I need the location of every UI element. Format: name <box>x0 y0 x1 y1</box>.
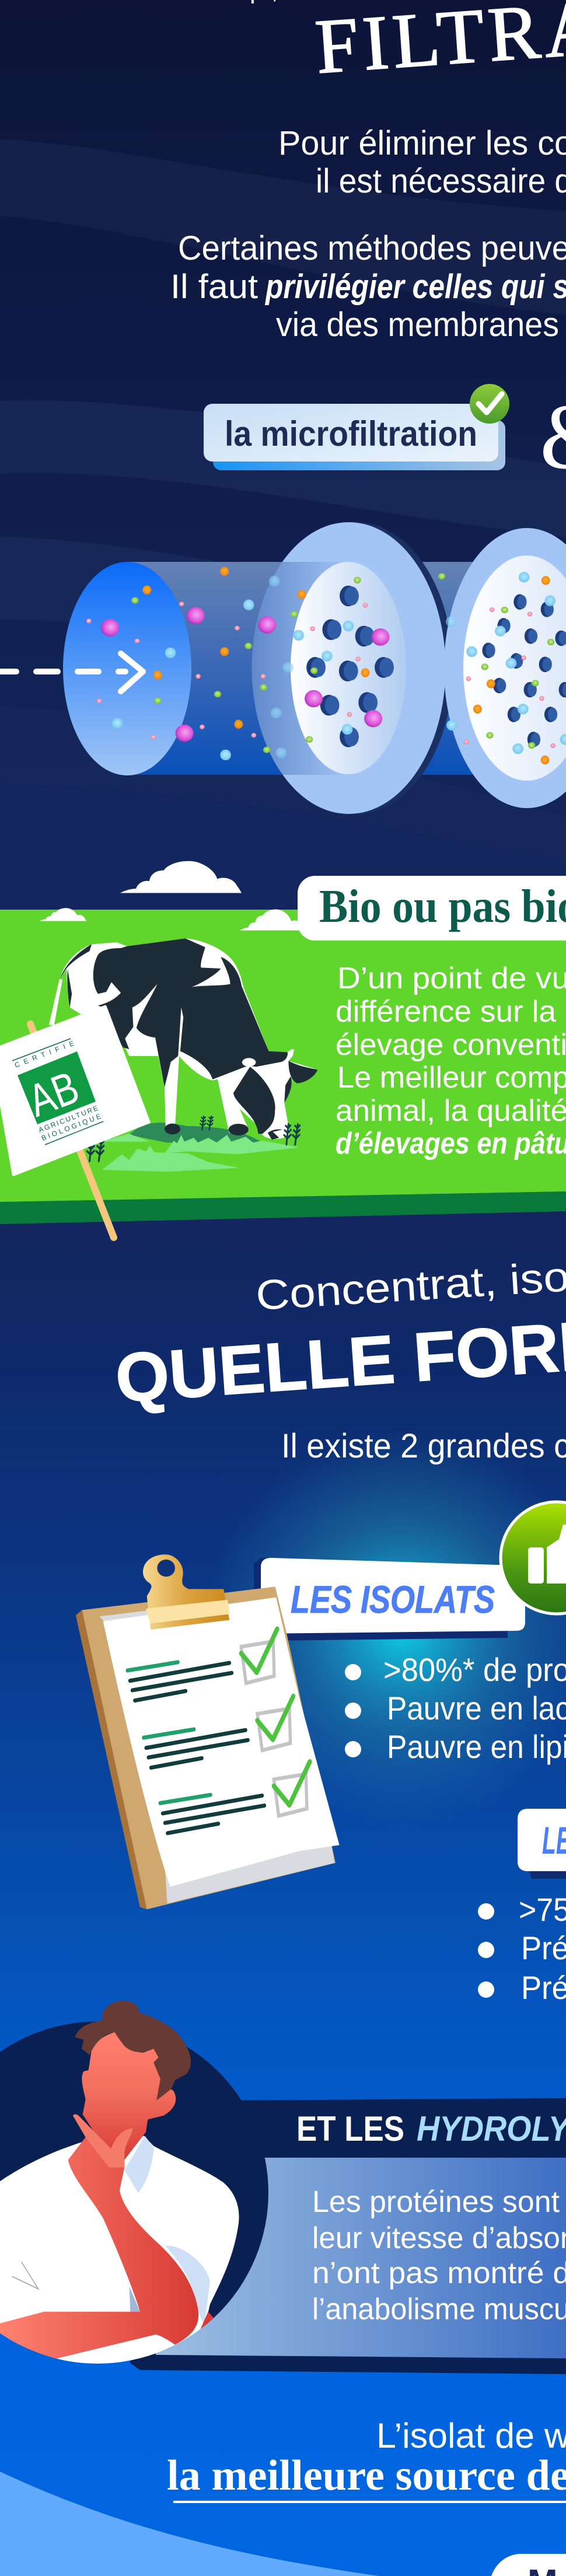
green field <box>0 1191 566 1224</box>
body text: Le meilleur comp <box>337 1061 566 1095</box>
conclusion: light blue arc <box>0 2472 379 2576</box>
button: la microfiltration <box>204 404 505 470</box>
body text: élevage conventi <box>336 1028 566 1062</box>
conclusion text: la meilleure source de <box>167 2452 566 2500</box>
decor: clouds above green band <box>120 861 242 893</box>
illustration: thinking person <box>0 2001 268 2365</box>
bottom white card <box>491 2554 566 2576</box>
AB logo: CERTIFIE <box>13 1039 75 1069</box>
checklist item 2 <box>144 1696 294 1768</box>
arrow: dashed flow <box>0 653 143 691</box>
checklist item 1 <box>127 1629 277 1701</box>
icon: thumbs up <box>501 1502 566 1614</box>
text block: filtration intro <box>170 124 566 344</box>
illustration: clipboard checklist <box>76 1554 340 1910</box>
body text: leur vitesse d’absor <box>312 2221 566 2255</box>
text block: filtration intro: Il faut <box>170 268 258 306</box>
stick of the sign <box>30 1024 114 1238</box>
sign: certified AB organic <box>0 1006 149 1175</box>
face and hair <box>73 2001 191 2168</box>
AB logo: BIOLOGIQUE <box>40 1112 102 1142</box>
body text: différence sur la <box>336 995 556 1029</box>
heading: Concentrat, isolat: Concentrat, iso <box>254 1253 566 1319</box>
icon: green check <box>470 384 509 424</box>
tube mouth <box>63 562 191 775</box>
label: second form <box>518 1809 566 1879</box>
label: les isolats <box>254 1558 525 1641</box>
body text: D’un point de vu <box>337 962 566 995</box>
label: les isolats: LES ISOLATS <box>291 1578 495 1621</box>
heading: ET LES <box>296 2109 404 2148</box>
body text <box>312 2185 566 2326</box>
conclusion text <box>167 2416 566 2503</box>
panel: bio or not bio <box>0 876 566 1238</box>
body text <box>336 962 566 1161</box>
checklist item 3 <box>160 1761 310 1833</box>
clipboard clamp <box>143 1554 230 1630</box>
list: isolats <box>345 1651 566 1765</box>
illustration: cow grazing <box>49 938 317 1172</box>
body text: animal, la qualité <box>336 1094 566 1128</box>
filter membrane 1 <box>251 522 453 814</box>
list: second form <box>478 1891 566 2006</box>
button: la microfiltration: la microfiltration <box>225 414 477 453</box>
AB logo <box>12 1039 103 1145</box>
conclusion text: L’isolat de w <box>376 2416 566 2455</box>
heading <box>296 2109 566 2148</box>
small clouds <box>40 908 304 931</box>
text block: filtration intro: via des membranes <box>276 306 559 344</box>
body text: n’ont pas montré d <box>312 2256 566 2290</box>
AB logo: AGRICULTURE <box>37 1104 99 1134</box>
AB logo: AB <box>22 1061 86 1127</box>
filter membrane 2 <box>444 528 566 808</box>
panel: hydrolysats <box>130 2098 566 2374</box>
membrane pores <box>306 586 566 747</box>
particles <box>86 567 566 764</box>
body text: Les protéines sont <box>312 2185 560 2219</box>
filtration tube illustration <box>63 522 566 814</box>
